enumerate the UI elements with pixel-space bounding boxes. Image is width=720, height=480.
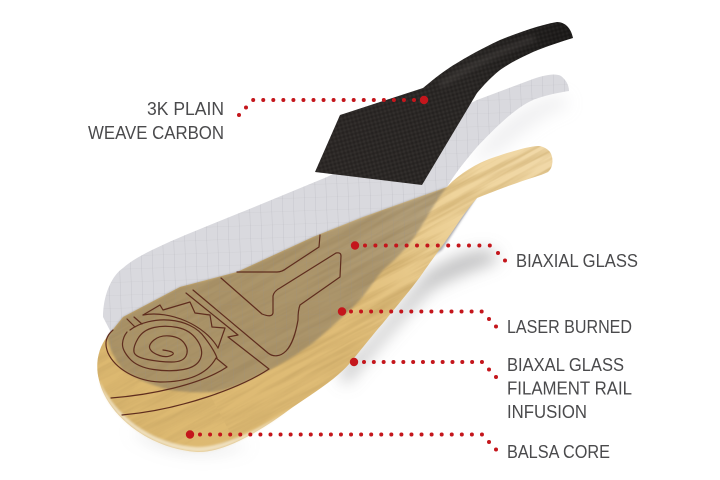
callout: biaxal glass filament rail infusion — [350, 354, 632, 422]
paddle balsa core wood layer — [97, 146, 552, 452]
callout: 3K plain weave carbon: 3K PLAIN — [147, 98, 224, 119]
callout: 3K plain weave carbon: WEAVE CARBON — [88, 122, 224, 143]
pale rim — [99, 380, 293, 452]
carbon shaft layer — [315, 22, 573, 185]
callout: biaxal glass filament rail infusion: INFUSION — [507, 401, 587, 422]
callout: balsa core: BALSA CORE — [507, 441, 610, 462]
callout: laser burned — [338, 307, 632, 337]
callout: biaxial glass: BIAXIAL GLASS — [516, 250, 638, 271]
callout: laser burned: LASER BURNED — [507, 316, 632, 337]
glass tint over wood — [107, 187, 447, 392]
laser burned artwork — [106, 235, 341, 415]
callout: biaxial glass — [351, 241, 638, 271]
glass edge sliver — [430, 196, 477, 258]
callout: 3K plain weave carbon — [88, 96, 428, 143]
callout: biaxal glass filament rail infusion: FILAMENT RAIL — [507, 378, 632, 398]
callout: biaxal glass filament rail infusion: BIAXAL GLASS — [507, 354, 624, 375]
cast shadows — [130, 95, 570, 453]
biaxial glass layer — [103, 75, 569, 380]
callout: balsa core — [186, 430, 610, 462]
